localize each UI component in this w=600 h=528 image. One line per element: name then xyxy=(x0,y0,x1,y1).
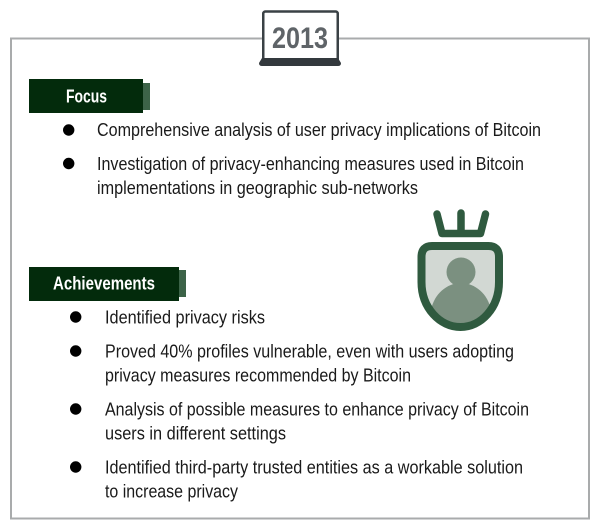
year badge: laptop icon xyxy=(259,12,341,66)
achievements bullet list: Identified third-party trusted entities as a workable solution xyxy=(105,458,523,478)
year label: 2013 xyxy=(272,22,328,55)
focus bullet list: Investigation of privacy-enhancing measures used in Bitcoin xyxy=(97,154,524,174)
achievements bullet list: to increase privacy xyxy=(105,482,238,502)
achievements bullet list: Identified privacy risks xyxy=(105,308,265,328)
heading: Focus: Focus xyxy=(66,86,107,106)
heading: Focus xyxy=(29,79,150,113)
heading: Achievements xyxy=(29,267,186,301)
icon: crowned shield user xyxy=(422,213,499,327)
user figure xyxy=(431,258,491,327)
heading: Achievements: Achievements xyxy=(53,274,155,294)
achievements bullet list: privacy measures recommended by Bitcoin xyxy=(105,366,411,386)
achievements bullet list: users in different settings xyxy=(105,424,286,444)
achievements bullet list: Proved 40% profiles vulnerable, even with users adopting xyxy=(105,342,514,362)
focus bullet list: Comprehensive analysis of user privacy implications of Bitcoin xyxy=(97,120,541,140)
focus bullet list: implementations in geographic sub-networks xyxy=(97,178,418,198)
achievements bullet list: Analysis of possible measures to enhance privacy of Bitcoin xyxy=(105,400,529,420)
achievements bullet list xyxy=(70,308,529,502)
focus bullet list xyxy=(63,120,541,198)
